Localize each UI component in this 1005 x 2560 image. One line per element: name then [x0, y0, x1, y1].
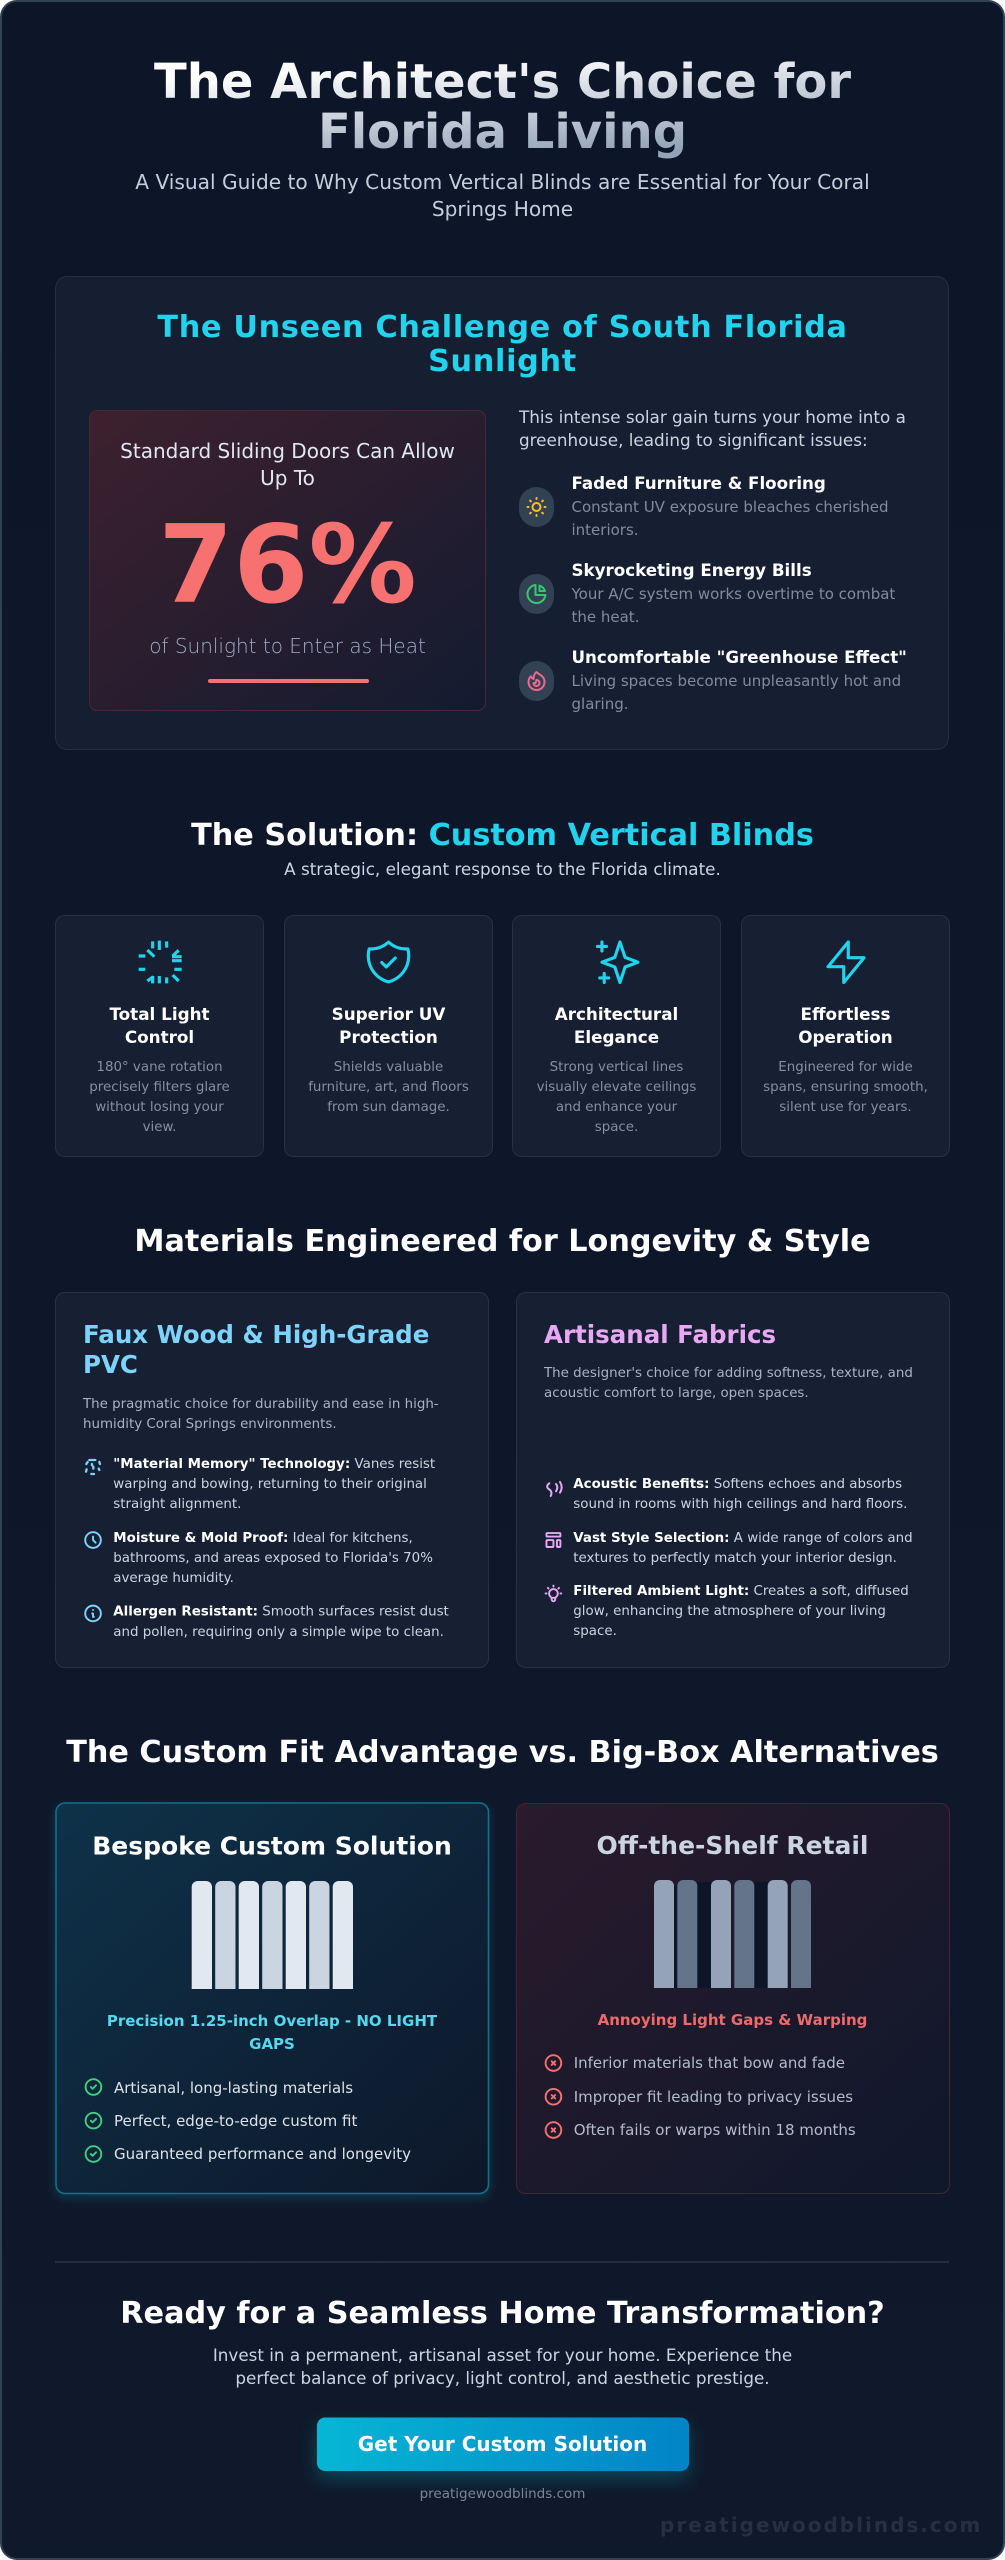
call to action text	[213, 2345, 792, 2388]
stat box: 76 percent: 76%	[158, 503, 417, 628]
title: Florida Living	[318, 104, 687, 160]
panel: faux wood and pvc	[56, 1292, 488, 1668]
icon: pie chart	[527, 585, 545, 603]
bullet: style selection: textures to perfectly match your interior design.	[573, 1551, 897, 1566]
bullet: style selection	[546, 1531, 913, 1566]
intro text: greenhouse, leading to significant issues:	[519, 430, 868, 450]
panel: effortless operation: Effortless	[800, 1004, 891, 1024]
panel: architectural elegance: Elegance	[574, 1027, 659, 1047]
list: benefits: Artisanal, long-lasting materials	[114, 2079, 353, 2097]
issue: energy bills: the heat.	[572, 608, 639, 626]
issue: energy bills	[519, 560, 895, 626]
panel description	[543, 1366, 913, 1401]
panel: architectural elegance	[512, 916, 720, 1156]
panel: effortless operation: Engineered for wide	[778, 1060, 913, 1075]
panel heading	[83, 1320, 429, 1379]
panel: effortless operation: spans, ensuring smooth,	[763, 1080, 928, 1095]
diagram: overlapping vanes	[192, 1881, 353, 1989]
title: The Architect's Choice for	[154, 54, 851, 110]
panel description: The designer's choice for adding softness, texture, and	[543, 1366, 913, 1381]
stat box: 76 percent	[90, 410, 486, 710]
call to action text: perfect balance of privacy, light control, and aesthetic prestige.	[235, 2368, 770, 2388]
caption: no light gaps: Precision 1.25-inch Overlap - NO LIGHT	[107, 2012, 438, 2030]
subtitle: Springs Home	[432, 197, 573, 221]
list: benefits	[86, 2079, 411, 2163]
stat box: 76 percent: Up To	[260, 466, 315, 490]
button: Get Your Custom Solution	[358, 2432, 647, 2456]
issue: greenhouse effect	[519, 647, 907, 713]
panel: architectural elegance: and enhance your	[556, 1100, 678, 1115]
icon: lightning bolt	[828, 942, 864, 982]
heading: the solution: The Solution: Custom Vertical Blinds	[191, 818, 814, 853]
panel: total light control: 180° vane rotation	[96, 1060, 223, 1075]
panel: architectural elegance: Strong vertical lines	[550, 1060, 683, 1075]
heading: unseen challenge: Sunlight	[428, 344, 577, 379]
list: benefits: Perfect, edge-to-edge custom fit	[114, 2112, 357, 2130]
panel: bespoke custom solution: Bespoke Custom Solution	[92, 1832, 452, 1860]
watermark: preatigewoodblinds.com	[660, 2513, 982, 2537]
call to action text: Invest in a permanent, artisanal asset for your home. Experience the	[213, 2345, 792, 2365]
intro text	[518, 407, 906, 450]
icon: sparkles	[597, 942, 638, 982]
panel: superior uv protection: from sun damage.	[327, 1100, 450, 1115]
panel: architectural elegance: Architectural	[555, 1004, 678, 1024]
caption: light gaps: Annoying Light Gaps & Warping	[598, 2011, 867, 2029]
panel: artisanal fabrics	[516, 1292, 950, 1668]
stat box: 76 percent: Standard Sliding Doors Can Allow	[120, 439, 455, 463]
bullet: material memory: straight alignment.	[113, 1497, 241, 1512]
panel: superior uv protection: Protection	[339, 1027, 438, 1047]
list: drawbacks: Often fails or warps within 18 months	[574, 2121, 856, 2139]
bullet: filtered light	[546, 1584, 909, 1639]
panel: total light control: Control	[125, 1027, 194, 1047]
bullet: moisture proof	[85, 1531, 433, 1586]
panel: total light control: view.	[143, 1120, 176, 1135]
issue: faded furniture: Constant UV exposure bleaches cherished	[572, 498, 888, 516]
bullet: material memory	[86, 1457, 435, 1512]
heading: call to action: Ready for a Seamless Home Transformation?	[120, 2296, 885, 2331]
bullet: material memory: warping and bowing, returning to their original	[113, 1477, 427, 1492]
issue: energy bills: Your A/C system works overtime to combat	[570, 585, 895, 603]
panel: off the shelf retail: Off-the-Shelf Retail	[596, 1831, 869, 1860]
issue: greenhouse effect: Uncomfortable "Greenhouse Effect"	[572, 647, 907, 667]
bullet: allergen resistant	[85, 1604, 449, 1640]
bullet: allergen resistant: Allergen Resistant: Smooth surfaces resist dust	[113, 1604, 449, 1620]
panel description: The pragmatic choice for durability and ease in high-	[82, 1397, 439, 1412]
issue: faded furniture: Faded Furniture & Flooring	[572, 473, 826, 493]
list: drawbacks: Inferior materials that bow and fade	[574, 2054, 845, 2072]
heading: unseen challenge: The Unseen Challenge of South Florida	[157, 310, 848, 345]
issue: greenhouse effect: Living spaces become unpleasantly hot and	[572, 672, 901, 690]
icon: shield check	[368, 942, 409, 982]
panel: the unseen challenge	[56, 276, 948, 750]
diagram: gapped vanes	[654, 1880, 811, 1988]
panel: bespoke custom solution	[56, 1803, 488, 2194]
bullet: acoustic benefits: sound in rooms with high ceilings and hard floors.	[573, 1497, 907, 1512]
icon: light rays	[139, 941, 182, 983]
list: drawbacks: Improper fit leading to privacy issues	[574, 2088, 853, 2106]
bullet: moisture proof: Moisture & Mold Proof: Ideal for kitchens,	[113, 1531, 413, 1546]
heading: unseen challenge	[157, 310, 848, 379]
heading: custom fit: The Custom Fit Advantage vs. Big-Box Alternatives	[66, 1735, 939, 1770]
issue: energy bills: Skyrocketing Energy Bills	[572, 560, 812, 580]
title	[154, 54, 851, 160]
heading: materials: Materials Engineered for Longevity & Style	[134, 1224, 871, 1259]
subtitle	[135, 170, 870, 221]
subtitle: A Visual Guide to Why Custom Vertical Blinds are Essential for Your Coral	[135, 170, 870, 194]
list: drawbacks	[546, 2054, 856, 2139]
stat box: 76 percent: of Sunlight to Enter as Heat	[149, 634, 426, 658]
panel heading: Faux Wood & High-Grade	[83, 1320, 429, 1349]
panel: total light control: without losing your	[95, 1100, 224, 1115]
issue: faded furniture	[519, 473, 888, 539]
panel: off the shelf retail	[516, 1804, 950, 2194]
panel: total light control: Total Light	[109, 1004, 210, 1024]
panel: superior uv protection: furniture, art, and floors	[308, 1080, 469, 1095]
solution subheading: A strategic, elegant response to the Florida climate.	[284, 859, 721, 879]
bullet: acoustic benefits	[547, 1477, 907, 1512]
bullet: style selection: Vast Style Selection: A wide range of colors and	[573, 1531, 913, 1546]
panel: effortless operation: Operation	[798, 1027, 893, 1047]
icon: fire	[528, 672, 544, 690]
bullet: moisture proof: bathrooms, and areas exposed to Florida's 70%	[113, 1551, 433, 1566]
intro text: This intense solar gain turns your home into a	[518, 407, 906, 427]
panel heading: Artisanal Fabrics	[544, 1320, 776, 1349]
caption: no light gaps: GAPS	[249, 2035, 295, 2053]
bullet: acoustic benefits: Acoustic Benefits: Softens echoes and absorbs	[573, 1477, 902, 1492]
panel description	[82, 1397, 439, 1432]
issue: greenhouse effect: glaring.	[572, 695, 629, 713]
panel: superior uv protection: Superior UV	[332, 1004, 445, 1024]
bullet: moisture proof: average humidity.	[113, 1571, 234, 1586]
panel heading: PVC	[83, 1350, 138, 1379]
panel: architectural elegance: space.	[595, 1120, 638, 1135]
bullet: filtered light: space.	[573, 1624, 617, 1639]
caption: no light gaps	[107, 2012, 438, 2053]
list: benefits: Guaranteed performance and longevity	[114, 2145, 411, 2163]
panel: effortless operation	[742, 916, 950, 1156]
website: preatigewoodblinds.com	[420, 2486, 585, 2502]
panel description: humidity Coral Springs environments.	[83, 1417, 337, 1432]
bullet: filtered light: glow, enhancing the atmosphere of your living	[573, 1604, 886, 1619]
panel description: acoustic comfort to large, open spaces.	[544, 1386, 809, 1401]
button	[317, 2418, 689, 2471]
bullet: material memory: "Material Memory" Technology: Vanes resist	[113, 1457, 435, 1472]
panel: total light control: precisely filters glare	[89, 1080, 230, 1095]
panel: superior uv protection	[284, 916, 492, 1156]
issue: faded furniture: interiors.	[572, 521, 639, 539]
bullet: allergen resistant: and pollen, requiring only a simple wipe to clean.	[113, 1625, 444, 1640]
icon: sun	[528, 498, 546, 516]
panel: architectural elegance: visually elevate ceilings	[537, 1080, 696, 1095]
panel: effortless operation: silent use for years.	[779, 1100, 912, 1115]
panel: superior uv protection: Shields valuable	[334, 1060, 443, 1075]
bullet: filtered light: Filtered Ambient Light: Creates a soft, diffused	[573, 1584, 909, 1599]
panel: total light control	[56, 916, 264, 1156]
